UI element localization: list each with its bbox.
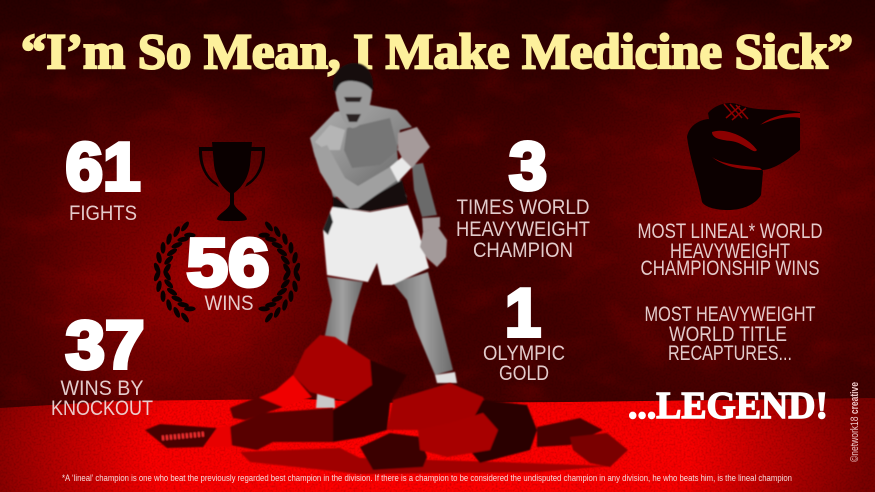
text: most recaptures: WORLD TITLE <box>669 323 787 346</box>
stat: 37 wins by knockout: KNOCKOUT <box>51 397 153 420</box>
wrist tape <box>422 217 440 232</box>
sock <box>435 372 457 383</box>
stat: 37 wins by knockout: 37 <box>66 307 144 383</box>
stat: 61 fights: FIGHTS <box>69 202 137 225</box>
text: most recaptures <box>644 303 816 365</box>
laces <box>162 434 205 438</box>
stat: 56 wins: 56 <box>186 225 270 301</box>
text: most lineal wins: MOST LINEAL* WORLD <box>638 220 822 243</box>
back leg <box>322 277 363 380</box>
stat: 3 times world heavyweight champion: HEAVYWEIGHT <box>456 218 590 241</box>
stat: 3 times world heavyweight champion: TIMES WORLD <box>456 196 590 219</box>
crossing arm <box>313 145 400 209</box>
shadow <box>240 448 610 474</box>
front glove <box>418 413 498 457</box>
trunks <box>333 360 407 442</box>
head <box>462 400 537 463</box>
raised shoe <box>230 397 283 420</box>
raised thigh <box>293 335 385 402</box>
waistband <box>333 180 408 211</box>
front arm <box>360 433 427 470</box>
stat: 61 fights: 61 <box>66 129 140 205</box>
torso <box>310 105 412 197</box>
stat: 1 olympic gold: OLYMPIC <box>483 342 565 365</box>
text: legend: ...LEGEND! <box>628 385 828 427</box>
stat: 3 times world heavyweight champion: 3 <box>509 128 547 204</box>
stat: 1 olympic gold: 1 <box>505 275 541 351</box>
text: most recaptures: RECAPTURES... <box>668 342 792 365</box>
standing boxer <box>310 63 457 408</box>
text: most lineal wins: HEAVYWEIGHT <box>670 240 790 263</box>
shoe <box>316 383 335 408</box>
stat: 56 wins: WINS <box>204 292 254 315</box>
icon: boxing gloves <box>687 103 800 210</box>
text: most lineal wins: CHAMPIONSHIP WINS <box>640 257 820 280</box>
wrist wrap <box>390 157 412 182</box>
icon: trophy <box>199 142 265 221</box>
sock <box>205 425 232 447</box>
stat: 3 times world heavyweight champion: CHAMPION <box>473 239 573 262</box>
raised shin <box>258 375 312 407</box>
shoe <box>145 424 217 448</box>
front leg <box>393 272 453 375</box>
lower glove <box>420 227 447 267</box>
far glove <box>570 433 628 467</box>
icon: laurel wreath <box>152 219 302 325</box>
text: most lineal wins <box>638 220 822 280</box>
credit: ©network18 creative <box>849 382 861 462</box>
text: most recaptures: MOST HEAVYWEIGHT <box>644 303 816 326</box>
upper glove <box>398 127 430 168</box>
head <box>335 68 372 128</box>
hanging arm <box>412 163 437 217</box>
chest shading <box>344 118 398 168</box>
knocked-out boxer <box>145 335 628 474</box>
stat: 1 olympic gold <box>483 275 565 385</box>
extended leg <box>230 408 333 450</box>
stat: 1 olympic gold: GOLD <box>499 362 549 385</box>
stat: 37 wins by knockout <box>51 307 153 420</box>
far arm <box>537 418 603 447</box>
torso <box>387 383 492 430</box>
title: “I’m So Mean, I Make Medicine Sick” <box>21 23 853 79</box>
stat: 3 times world heavyweight champion <box>456 128 590 262</box>
stat: 37 wins by knockout: WINS BY <box>60 377 144 400</box>
shorts <box>323 205 429 285</box>
